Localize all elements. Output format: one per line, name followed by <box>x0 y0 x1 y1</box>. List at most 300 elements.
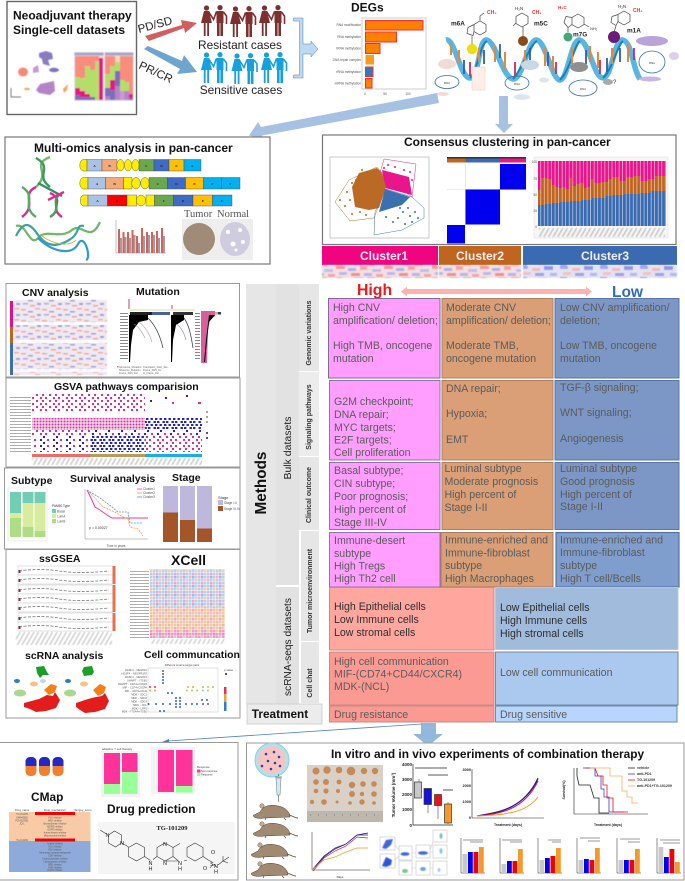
column: methods label: Methods <box>253 452 270 514</box>
row label: clinical outcome <box>299 457 319 530</box>
chart: cell communication dot plot: MDK − SDC4 <box>131 700 148 704</box>
chart: cell communication dot plot: NAMPT − ITGB1 <box>128 678 148 682</box>
chart: cell communication dot plot: HGSF4 − NEGFR1R2 <box>122 672 148 676</box>
panel: CMap and drug prediction <box>0 742 238 880</box>
cell: low genomic: Low TMB, oncogene <box>560 340 657 352</box>
chart: survival steps and legend <box>562 766 672 827</box>
chart: cell communication dot plot: MIF − CD74+CXCR4 <box>123 686 148 690</box>
cell: low signaling: WNT signaling; <box>560 407 632 419</box>
heading: multi-omics analysis: Multi-omics analysis in pan-cancer <box>34 141 233 155</box>
row label: cell chat <box>301 642 319 703</box>
chart: cell communication dot plot: p value <box>224 668 233 672</box>
stacked bar chart <box>74 52 134 101</box>
m1A readers cycle <box>636 36 679 82</box>
row label: treatment <box>247 704 322 724</box>
cell: low communication <box>496 652 678 705</box>
chart: survival curves: Cluster2 <box>143 491 155 495</box>
chart: DEG enrichment bars: 100 <box>405 92 411 96</box>
chart: cell communication dot plot: MDK − NCL <box>133 703 148 707</box>
heading: experiments: In vitro and in vivo experiments of combination therapy <box>331 747 645 761</box>
cell: high epithelial: High Epithelial cells <box>334 601 426 613</box>
molecule: TG-101209 structure: H <box>214 870 218 876</box>
molecule: TG-101209 structure: H <box>178 866 182 872</box>
gene isoform row 1: D <box>160 164 163 168</box>
gene isoform row 2: E <box>193 182 196 186</box>
panel: subtype survival stage <box>4 468 241 549</box>
molecule: TG-101209 structure: N <box>163 842 167 848</box>
cell: low clinical: Luminal subtype <box>560 463 637 475</box>
chart: adaptive T cell therapy response bars <box>101 747 140 797</box>
chart: adaptive T cell therapy response bars: adaptive T cell therapy <box>102 747 133 751</box>
cell: moderate microenvironment: Immune-enriched and <box>445 534 548 546</box>
cell: moderate genomic: oncogene mutation <box>446 353 536 365</box>
umap: scRNA high <box>14 666 60 712</box>
chart: survival steps and legend: Treatment (days) <box>594 823 622 827</box>
label: sensitive cases: Sensitive cases <box>200 83 282 97</box>
panel: immune and scRNA analysis <box>6 550 240 718</box>
chart: response bars second cohort <box>151 747 218 794</box>
chart: stacked proportion bars <box>532 157 668 238</box>
cluster 2 bar <box>439 246 521 265</box>
heading: GSVA: GSVA pathways comparision <box>54 381 199 393</box>
cell: low microenvironment: Immune-fibroblast <box>560 547 645 559</box>
label: high: High <box>357 282 392 299</box>
cell: moderate genomic: amplification/ deletion; <box>446 315 551 327</box>
molecule: TG-101209 structure: N <box>106 833 110 839</box>
molecule: TG-101209 structure <box>98 822 235 876</box>
gene isoform row 1: A <box>93 164 96 168</box>
table: CMap drugs: Drug_mechanism <box>44 808 67 812</box>
cell: high clinical: Basal subtype; <box>334 465 404 477</box>
cell: moderate genomic <box>442 298 553 378</box>
row label: tumor microenvironment: Tumor microenvironment <box>307 548 314 633</box>
m7G molecule: NH₂ <box>590 26 598 31</box>
chart: subtype stacked bars <box>8 488 70 541</box>
chart: tumor volume box plot <box>391 762 453 828</box>
m5C molecule: m5C <box>534 20 548 28</box>
chart: tumor growth curves: 2000 <box>463 784 471 788</box>
icon: bracket arrow <box>294 18 318 78</box>
cell: moderate microenvironment: High Macrophages <box>445 573 534 585</box>
m5C molecule: CH₃ <box>532 10 542 16</box>
chart: oncoplot mutation waterfall: Missense_Mutation <box>119 369 141 372</box>
table: CMap drugs: PLK inhibitor <box>48 848 62 852</box>
chart: stage stacked bars: Stage III-IV <box>224 507 241 511</box>
table: CMap drugs: Cyclooxygenase inhibitor <box>42 858 68 860</box>
cell: high microenvironment: High Th2 cell <box>334 573 396 585</box>
panel: GSVA pathways <box>6 378 240 467</box>
chart: flow cytometry gates <box>380 830 447 875</box>
chart: CD8 T cell bar 5 <box>617 838 641 873</box>
chart: cell communication dot plot: HGSF4 − NEGFR1 <box>125 668 148 672</box>
chart: oncoplot mutation waterfall: Frame_Shift_Ins <box>143 369 162 372</box>
table row: genomic variations <box>328 298 679 378</box>
arrow: PD/SD to resistant <box>137 15 197 41</box>
heading: consensus clustering: Consensus clustering in pan-cancer <box>404 135 611 149</box>
gene isoform row 3: F <box>221 199 223 203</box>
cluster 3 bar <box>523 246 677 265</box>
m1A molecule: CH₃ <box>633 8 643 14</box>
chart: tumor volume box plot: Tumor Volume (mm³) <box>391 772 396 817</box>
column: scRNA-seqs datasets: scRNA-seqs datasets <box>283 598 294 696</box>
arrow: PR/CR to sensitive: PR/CR <box>137 60 174 86</box>
table: CMap drugs: JQ-1 <box>20 824 25 826</box>
cell: moderate clinical: Luminal subtype <box>444 463 522 475</box>
chart: survival curves <box>85 487 155 548</box>
chart: oncoplot mutation waterfall: Translation_Start_Site <box>143 366 168 369</box>
cell: low epithelial: Low Epithelial cells <box>500 602 590 614</box>
panel: in vitro and in vivo experiments <box>246 743 684 880</box>
table row: treatment <box>330 706 677 722</box>
cell: low signaling: TGF-β signaling; <box>560 382 639 394</box>
label: DEGs title: DEGs <box>351 0 384 14</box>
heading: subtype: Subtype <box>11 475 53 487</box>
chart: DEG enrichment bars: 0 <box>364 92 366 96</box>
icon: splicing DNA strands <box>22 157 64 217</box>
table: CMap drugs: PLK inhibitor <box>48 846 62 848</box>
cell: moderate microenvironment: Immune-fibroblast <box>445 548 530 560</box>
cell: high signaling: Cell proliferation <box>334 447 411 459</box>
chart: survival curves: Cluster1 <box>143 487 155 491</box>
heatmap: CNV <box>10 300 107 375</box>
column: bulk datasets: Bulk datasets <box>282 416 294 480</box>
row label: cell chat: Cell chat <box>307 668 314 698</box>
table: CMap drugs: Aurora kinase inhibitor <box>44 832 67 834</box>
gene isoform row 3: A <box>96 199 99 203</box>
m7G readers cycle: RNA <box>580 87 586 91</box>
cell: high genomic: High CNV <box>333 302 381 314</box>
row label: genomic variations <box>299 284 319 371</box>
cell: high microenvironment: subtype <box>334 548 371 560</box>
molecule: TG-101209 structure: N <box>163 861 167 867</box>
panel: CNV and mutation <box>6 284 240 377</box>
cell: low genomic <box>555 298 679 378</box>
image: tumor and normal IHC tissue <box>182 219 253 260</box>
chart: oncoplot mutation waterfall: In_Frame_Del <box>143 372 159 375</box>
chart: cell communication dot plot: MIF − CD74+CD44 <box>125 689 148 693</box>
m1A molecule: m1A <box>627 28 641 34</box>
arrow: to consensus clustering <box>495 96 513 133</box>
row label: clinical outcome: Clinical outcome <box>306 467 313 523</box>
table: CMap drugs: TG-101209 <box>16 840 29 842</box>
heading: mutation: Mutation <box>136 286 180 298</box>
chart: cell communication dot plot: MDK − SDC2 <box>131 696 148 700</box>
chart: DEG enrichment bars <box>333 18 426 96</box>
cluster 1 bar <box>322 246 438 265</box>
cell: low signaling <box>555 380 679 460</box>
chart: ssGSEA violin rows <box>16 566 116 645</box>
chart: CD8 T cell bar 3 <box>538 838 562 873</box>
column: methods label <box>246 284 276 704</box>
chart: subtype stacked bars: Basal <box>57 510 65 514</box>
table row: cell composition <box>330 588 678 650</box>
chart: oncoplot mutation waterfall: Frame_Shift_Del <box>119 372 138 375</box>
cell: high genomic <box>328 298 440 378</box>
chart: stacked proportion bars: 75 <box>533 177 537 181</box>
chart: cell communication dot plot: MDK − ITGA4+ITGB1 <box>122 710 148 714</box>
cell: high clinical: Stage III-IV <box>334 517 388 529</box>
chart: tumor volume box plot: 4000 <box>402 762 412 767</box>
column: scRNA-seqs datasets <box>276 587 299 704</box>
gene isoform row 3: E <box>202 199 205 203</box>
heading: scRNA: scRNA analysis <box>25 650 104 662</box>
dot matrix: GSVA <box>10 394 208 465</box>
gene isoform row 1 <box>80 160 201 171</box>
table: CMap drugs: GW843682 <box>16 818 29 820</box>
chart: DEG enrichment bars: RNA methylation <box>337 35 361 39</box>
table: CMap drugs: Drug_name <box>15 808 30 812</box>
chart: stacked proportion bars: 50 <box>533 193 537 197</box>
gene isoform row 3: H <box>116 199 119 203</box>
chart: CD8 T cell bar 2 <box>500 838 524 873</box>
cell: low microenvironment: subtype <box>560 560 597 572</box>
cell: high microenvironment <box>330 532 440 587</box>
chart: cell communication dot plot: Different source-target pairs <box>165 663 200 667</box>
cell: high clinical <box>330 462 440 530</box>
cell: drug resistance <box>330 706 494 722</box>
m1A molecule: H₂N <box>618 4 626 9</box>
photo: excised tumors <box>307 765 383 822</box>
chart: response bars second cohort: Response <box>201 772 213 776</box>
chart: response bars second cohort: Response <box>197 765 210 769</box>
cell: moderate clinical: High percent of <box>444 489 516 501</box>
table: CMap drugs: KDR inhibitor <box>48 866 62 870</box>
m6A molecule: CH₃ <box>487 10 497 16</box>
cell: low genomic: mutation <box>560 353 601 365</box>
chart: stacked proportion bars: 100 <box>532 160 537 164</box>
cell: low signaling: Angiogenesis <box>560 433 624 445</box>
molecule: TG-101209 structure: O <box>211 850 216 856</box>
chart: DEG enrichment bars: 50 <box>383 92 387 96</box>
chart: CD8 T cell bar 4 <box>577 838 601 873</box>
label: tumor normal <box>184 209 249 220</box>
arrow: PD/SD to resistant: PD/SD <box>137 15 174 36</box>
heading: CMap: CMap <box>31 790 63 804</box>
cell: high genomic: mutation <box>333 353 374 365</box>
cell: low epithelial <box>496 588 678 650</box>
molecule: TG-101209 structure: O <box>203 866 208 872</box>
cluster 3 bar: Cluster3 <box>581 249 629 263</box>
chart: survival steps and legend: anti-PD1 <box>637 772 652 776</box>
gene isoform row 2: F <box>211 182 214 186</box>
chart: cell communication dot plot: MDK − LRP1 <box>132 706 148 710</box>
gene isoform row 2 <box>80 178 240 189</box>
cell: high epithelial <box>330 588 494 650</box>
chart: CD8 T cell bar 6 <box>657 838 681 873</box>
row label: tumor microenvironment <box>301 531 319 641</box>
molecule: TG-101209 structure: S <box>210 862 214 868</box>
cell: high clinical: CIN subtype; <box>334 478 395 490</box>
cell: high clinical: Poor prognosis; <box>334 491 408 503</box>
chart: subtype stacked bars: PAM50 Type <box>52 504 70 508</box>
chart: stacked proportion bars: 0 <box>535 225 537 229</box>
chart: oncoplot mutation waterfall <box>117 299 221 375</box>
panel: multi-omics analysis <box>5 137 270 264</box>
chart: tumor volume box plot: 0 <box>409 823 412 828</box>
heatmap: xCell <box>130 569 225 644</box>
table row: signaling pathways <box>330 380 679 460</box>
cell: moderate clinical: Moderate prognosis <box>444 476 538 488</box>
arrow: down to experiments <box>413 723 443 746</box>
cell: high signaling: E2F targets; <box>334 434 392 446</box>
chart: expression bars <box>116 220 166 253</box>
heatmap strip under clusters <box>322 265 677 278</box>
heading: neoadjuvant therapy: Neoadjuvant therapy <box>13 8 132 22</box>
cell: drug resistance: Drug resistance <box>334 709 408 721</box>
umap: scRNA low <box>64 666 109 713</box>
chart: cell communication dot plot: NAMPT − CD74+CXCR4 <box>118 682 148 686</box>
m1A molecule <box>608 4 643 43</box>
cell: low microenvironment <box>556 532 679 587</box>
cell: moderate clinical <box>442 462 553 530</box>
chart: cell communication dot plot: HGSF4 − NEGFR1 <box>125 675 148 679</box>
cell: high communication: MDK-(NCL) <box>334 681 389 693</box>
table: CMap drugs: MDM2 inhibitor <box>47 826 63 828</box>
cell: low communication: Low cell communication <box>500 667 613 679</box>
label: tumor normal: Tumor <box>184 209 213 220</box>
cell: low epithelial: High stromal cells <box>500 628 584 640</box>
gene isoform row 1: E <box>175 164 178 168</box>
chart: tumor growth curves: 0 <box>469 816 471 820</box>
cell: high signaling: G2M checkpoint; <box>334 396 414 408</box>
table: CMap drugs: Tanguy_score <box>74 808 92 812</box>
gene isoform row 2: C <box>157 182 160 186</box>
arrow: high to low gradient <box>401 286 592 296</box>
cell: moderate signaling: EMT <box>446 434 469 446</box>
icon: treated mice <box>251 804 298 878</box>
icon: syringe <box>275 774 282 802</box>
icon: resistant patient group <box>201 5 284 37</box>
heading: CNV analysis: CNV analysis <box>22 287 89 299</box>
table: CMap drugs: Bromodomain inhibitor <box>44 822 67 826</box>
chart: cell communication dot plot <box>118 663 233 714</box>
table row: tumor microenvironment <box>330 532 679 587</box>
chart: DEG enrichment bars: RNA modification <box>337 23 361 27</box>
cell: high microenvironment: High Tregs <box>334 560 385 572</box>
chart: stage stacked bars: Stage I-II <box>224 501 237 505</box>
arrow: to multi-omics analysis <box>249 93 439 139</box>
m6A molecule <box>451 10 497 54</box>
row label: signaling pathways <box>299 372 319 456</box>
cell: moderate signaling: Hypoxia; <box>446 408 487 420</box>
table: CMap drugs: BRD inhibitor <box>48 864 62 866</box>
chart: survival steps and legend: vehicle <box>637 766 649 770</box>
column: bulk datasets <box>276 284 299 585</box>
chart: survival curves: Cluster3 <box>143 495 155 499</box>
cell: moderate clinical: Stage I-II <box>444 502 488 514</box>
molecule: TG-101209 structure: H <box>149 866 153 872</box>
gene isoform row 3: C <box>163 199 166 203</box>
heading: xCell: XCell <box>171 552 206 568</box>
cluster 1 bar: Cluster1 <box>360 249 408 263</box>
table: CMap drugs: CDK inhibitor <box>48 854 62 858</box>
chart: DEG enrichment bars: tRNA methylation <box>336 46 361 50</box>
molecule: TG-101209 structure: TG-101209 <box>156 825 188 832</box>
m7G readers cycle: ? <box>613 80 617 86</box>
table: CMap drugs: MEK inhibitor <box>48 820 62 822</box>
m5C readers cycle <box>505 60 549 100</box>
chart: survival steps and legend: TG-101209 <box>637 778 655 782</box>
table: CMap drugs: PD-0325901 <box>16 820 29 822</box>
chart: DEG enrichment bars: rRNA methylation <box>336 70 361 74</box>
cell: high signaling: MYC targets; <box>334 422 396 434</box>
icon: cell culture dish <box>255 743 289 777</box>
m5C readers cycle: RNA <box>514 82 520 86</box>
gene isoform row 2: F <box>229 182 232 186</box>
chart: stage stacked bars: Stage <box>218 495 229 500</box>
cell: moderate genomic: Moderate TMB, <box>446 340 519 352</box>
table: CMap drugs: Adrenergic receptor antagonist <box>39 852 71 854</box>
chart: DEG enrichment bars: mRNA methylation <box>335 82 361 86</box>
chart: subtype stacked bars: LumA <box>57 514 66 518</box>
table: CMap drugs: Aspirin inhibitor <box>47 842 63 846</box>
cell: drug sensitive <box>496 706 677 722</box>
table: CMap drugs: Mitochondrial inhibitor <box>44 834 66 838</box>
chart: cell viability lines: Days <box>337 875 344 879</box>
cell: high microenvironment: Immune-desert <box>334 535 405 547</box>
gene isoform row 3 <box>80 195 232 206</box>
m7G molecule: m7G <box>573 32 587 38</box>
row label: signaling pathways: Signaling pathways <box>306 384 313 450</box>
gene isoform row 1: C <box>145 164 148 168</box>
m7G readers cycle <box>569 62 617 96</box>
icon: sensitive patient group <box>201 52 286 84</box>
cell: low clinical <box>555 462 679 530</box>
heading: single-cell datasets: Single-cell datasets <box>13 23 125 37</box>
chart: tumor volume box plot: 2000 <box>402 792 412 797</box>
arrow: thin line to drug prediction <box>162 724 422 744</box>
table row: clinical outcome <box>330 462 679 530</box>
molecule: TG-101209 structure: N <box>120 841 124 847</box>
cell: low microenvironment: Immune-enriched and <box>560 534 663 546</box>
gene isoform row 2: D <box>175 182 178 186</box>
cell: low epithelial: High Immune cells <box>500 615 587 627</box>
umap cluster plot <box>11 51 68 97</box>
heading: survival analysis: Survival analysis <box>70 473 155 485</box>
gene isoform row 2: A <box>96 182 99 186</box>
gene isoform row 1: B <box>108 164 111 168</box>
table: CMap drugs: Lipoxygenase inhibitor <box>44 860 67 864</box>
label: low: Low <box>612 284 644 301</box>
cell: moderate genomic: Moderate CNV <box>446 302 517 314</box>
heading: stage: Stage <box>172 472 201 484</box>
chart: survival steps and legend: Survival(%) <box>562 780 566 800</box>
cell: moderate microenvironment: subtype <box>445 560 482 572</box>
cell: moderate signaling: DNA repair; <box>446 383 501 395</box>
row label: genomic variations: Genomic variations <box>306 300 313 365</box>
panel: neoadjuvant therapy single-cell datasets <box>7 2 136 114</box>
cell: high signaling <box>330 380 440 460</box>
chart: tumor growth curves <box>463 768 544 827</box>
cell: low genomic: Low CNV amplification/ <box>560 302 670 314</box>
chart: tumor volume box plot: 1000 <box>402 807 412 812</box>
chart: tumor growth curves: 3000 <box>463 768 471 772</box>
chart: CD8 T cell bar 1 <box>461 838 485 873</box>
label: resistant cases: Resistant cases <box>198 38 282 52</box>
chart: survival curves: p = 0.00027 <box>89 526 108 530</box>
table: CMap drugs: EGFR inhibitor <box>47 828 63 832</box>
chart: DEG enrichment bars: DNA repair complex <box>333 58 361 62</box>
cell: low genomic: deletion; <box>560 315 600 327</box>
cell: high epithelial: Low stromal cells <box>334 627 415 639</box>
heading: drug prediction: Drug prediction <box>107 802 196 816</box>
chart: stacked proportion bars: 25 <box>533 209 537 213</box>
label: tumor normal: Normal <box>217 209 249 220</box>
cell: low clinical: High percent of <box>560 489 632 501</box>
m1A readers cycle: RNA <box>649 61 655 65</box>
cluster 2 bar: Cluster2 <box>456 249 504 263</box>
table: CMap drugs: PLK inhibitor <box>48 816 62 820</box>
